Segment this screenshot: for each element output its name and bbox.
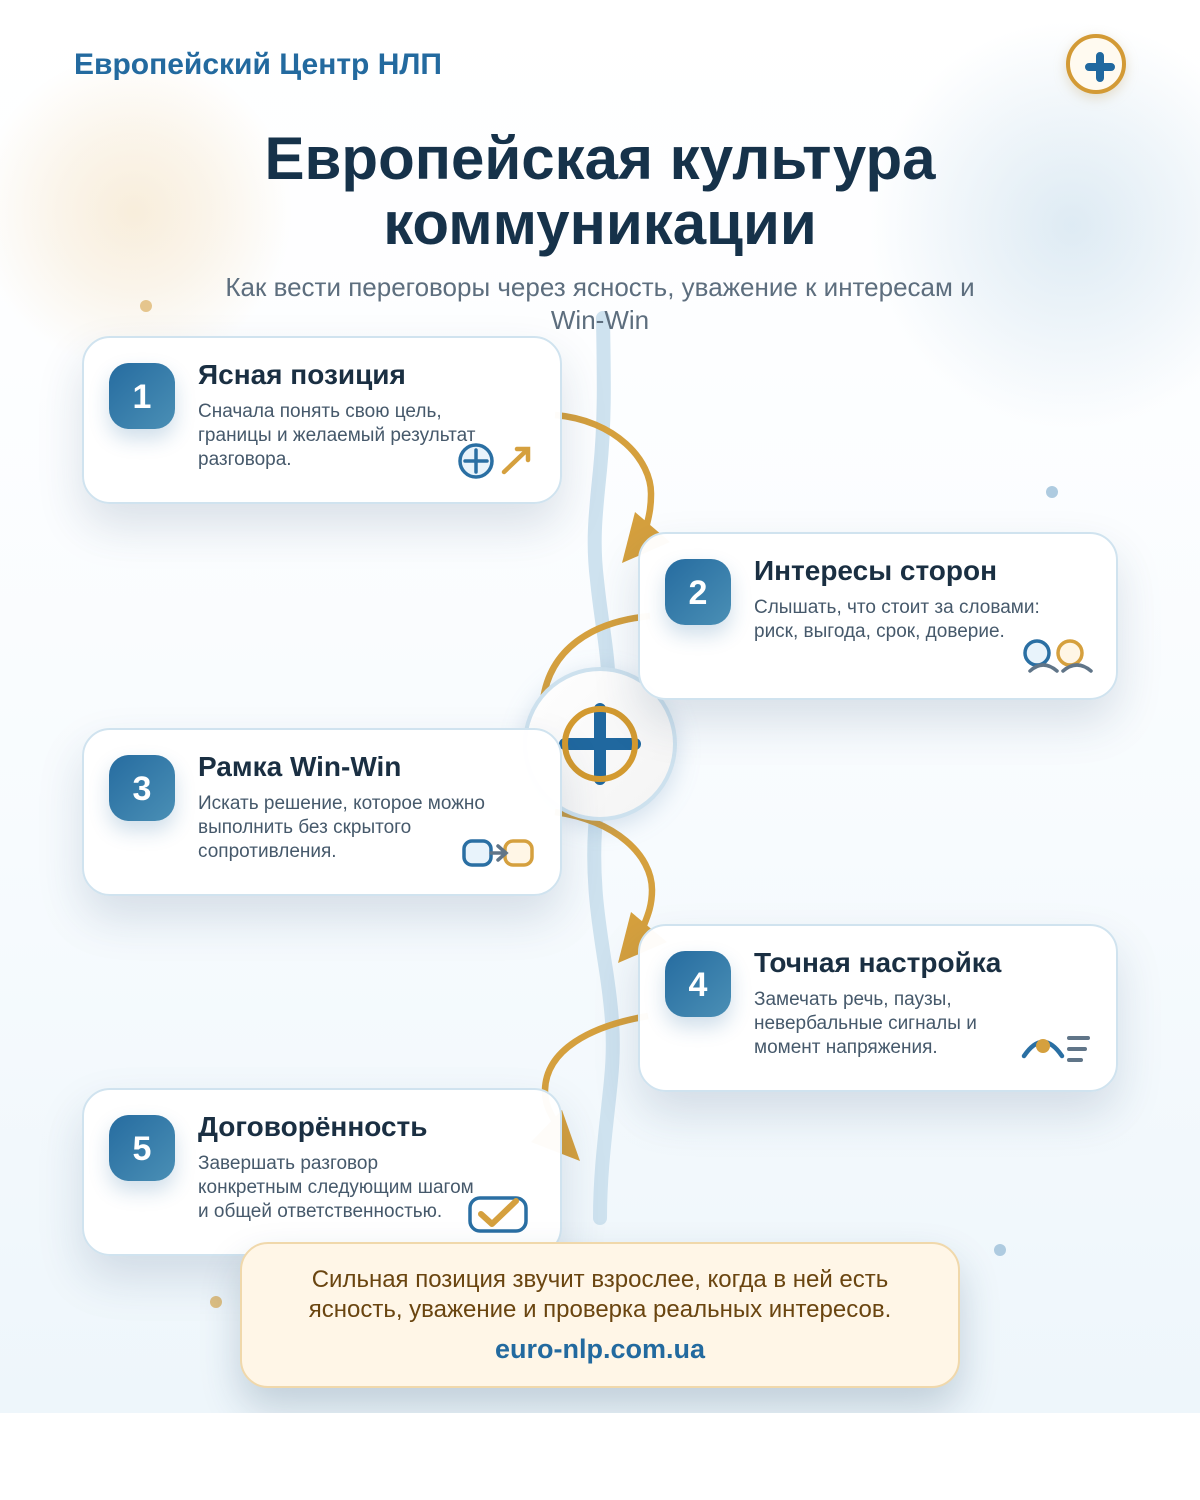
card 4 title: Точная настройка xyxy=(754,947,1001,978)
badge 3 xyxy=(109,755,175,821)
connector 1 to 2 xyxy=(555,415,670,563)
footer message xyxy=(309,1266,891,1323)
badge 4: 4 xyxy=(689,966,707,1004)
dot blue right xyxy=(1046,486,1058,498)
badge 1 xyxy=(109,363,175,429)
badge 1: 1 xyxy=(133,378,151,416)
icon: two boxes with arrow xyxy=(462,839,534,867)
logo icon xyxy=(1060,32,1132,104)
card 2 xyxy=(638,532,1118,700)
main title xyxy=(265,125,936,257)
card 2 text: риск, выгода, срок, доверие. xyxy=(754,621,1005,642)
badge 4 xyxy=(665,951,731,1017)
main title: Европейская культура xyxy=(265,125,935,192)
icon: target and arrow xyxy=(458,443,530,479)
dot gold top xyxy=(140,300,152,312)
card 4 text: момент напряжения. xyxy=(754,1037,938,1058)
card 1 text: Сначала понять свою цель, xyxy=(198,401,442,422)
subtitle xyxy=(225,272,975,335)
icon: check box xyxy=(468,1196,528,1233)
subtitle: Как вести переговоры через ясность, уважение к интересам и xyxy=(225,272,975,302)
card 1 xyxy=(82,336,562,504)
card 3 text: Искать решение, которое можно xyxy=(198,793,485,814)
card 1 title: Ясная позиция xyxy=(198,359,406,390)
card 2 title: Интересы сторон xyxy=(754,555,997,586)
card 3 text: выполнить без скрытого xyxy=(198,817,411,838)
card 1 text: границы и желаемый результат xyxy=(198,425,476,446)
badge 2: 2 xyxy=(689,574,707,612)
icon: tone arc and lines xyxy=(1022,1036,1090,1062)
cool glow xyxy=(867,20,1200,430)
card 3 xyxy=(82,728,562,896)
central hub xyxy=(517,664,686,836)
card 4 text: Замечать речь, паузы, xyxy=(754,989,952,1010)
badge 5: 5 xyxy=(133,1130,151,1168)
badge 5 xyxy=(109,1115,175,1181)
card 4 xyxy=(638,924,1118,1092)
icon: two people xyxy=(1023,639,1093,673)
card 2 text: Слышать, что стоит за словами: xyxy=(754,597,1040,618)
dot gold bottom xyxy=(210,1296,222,1308)
card 5 title: Договорённость xyxy=(198,1111,427,1142)
footer callout xyxy=(240,1242,960,1388)
footer message: Сильная позиция звучит взрослее, когда в ней есть xyxy=(312,1266,888,1293)
card 5 text xyxy=(198,1153,474,1222)
main title: коммуникации xyxy=(383,190,817,257)
card 4 text xyxy=(754,989,977,1058)
card 5 xyxy=(82,1088,562,1256)
card 4 text: невербальные сигналы и xyxy=(754,1013,977,1034)
badge 2 xyxy=(665,559,731,625)
footer message: ясность, уважение и проверка реальных интересов. xyxy=(309,1296,891,1323)
card 3 title: Рамка Win-Win xyxy=(198,751,401,782)
connector 3 to 4 xyxy=(555,812,667,963)
card 5 text: конкретным следующим шагом xyxy=(198,1177,474,1198)
badge 3: 3 xyxy=(133,770,151,808)
connector 2 to 3 xyxy=(543,616,650,700)
connector 4 to 5 xyxy=(531,1016,648,1161)
card 1 text: разговора. xyxy=(198,449,292,470)
card 5 text: Завершать разговор xyxy=(198,1153,378,1174)
card 3 text: сопротивления. xyxy=(198,841,337,862)
card 5 text: и общей ответственностью. xyxy=(198,1201,442,1222)
card 1 text xyxy=(198,401,476,470)
footer link: euro-nlp.com.ua xyxy=(495,1334,705,1364)
card 3 text xyxy=(198,793,485,862)
dot blue bottom xyxy=(994,1244,1006,1256)
warm glow xyxy=(0,52,294,372)
brand name: Европейский Центр НЛП xyxy=(74,48,442,81)
subtitle: Win-Win xyxy=(551,305,649,335)
card 2 text xyxy=(754,597,1040,642)
